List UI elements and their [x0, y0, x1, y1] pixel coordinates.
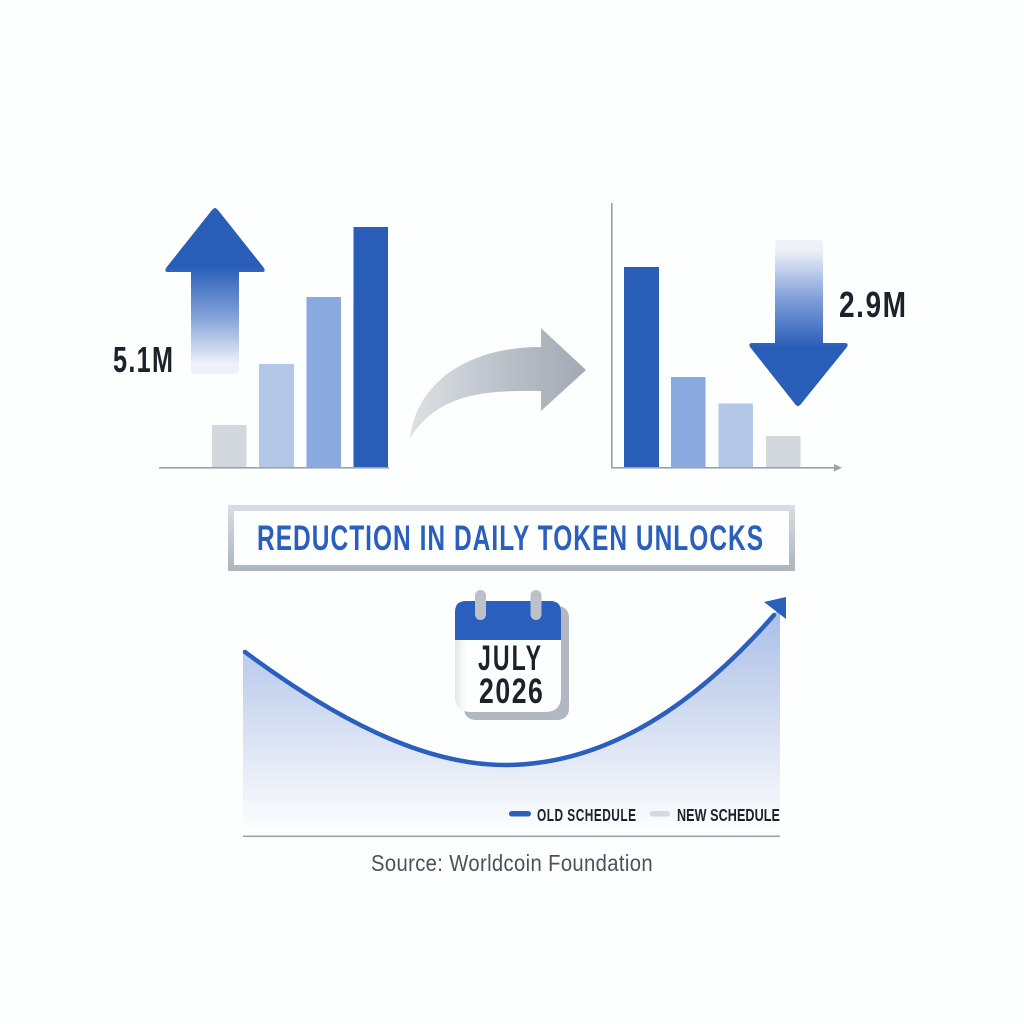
legend	[509, 806, 780, 826]
title: REDUCTION IN DAILY TOKEN UNLOCKS	[257, 520, 763, 558]
icon: down arrow	[749, 240, 848, 406]
source note: Source: Worldcoin Foundation	[371, 850, 653, 876]
calendar month: JULY	[478, 639, 541, 678]
icon: up arrow	[165, 208, 265, 374]
legend: OLD SCHEDULE	[537, 806, 636, 826]
title banner	[231, 508, 792, 568]
value: 5.1M: 5.1M	[113, 340, 173, 380]
area fill	[243, 607, 780, 832]
calendar year: 2026	[479, 671, 543, 711]
curve arrowhead	[764, 597, 786, 619]
area chart	[243, 597, 786, 837]
legend: NEW SCHEDULE	[677, 806, 780, 826]
schedule curve	[245, 615, 774, 765]
right bar chart: falling	[611, 203, 842, 472]
icon: calendar	[455, 590, 569, 720]
icon: curved transition arrow	[410, 328, 586, 438]
left bar chart: rising	[159, 227, 389, 469]
value: 2.9M: 2.9M	[839, 285, 906, 325]
